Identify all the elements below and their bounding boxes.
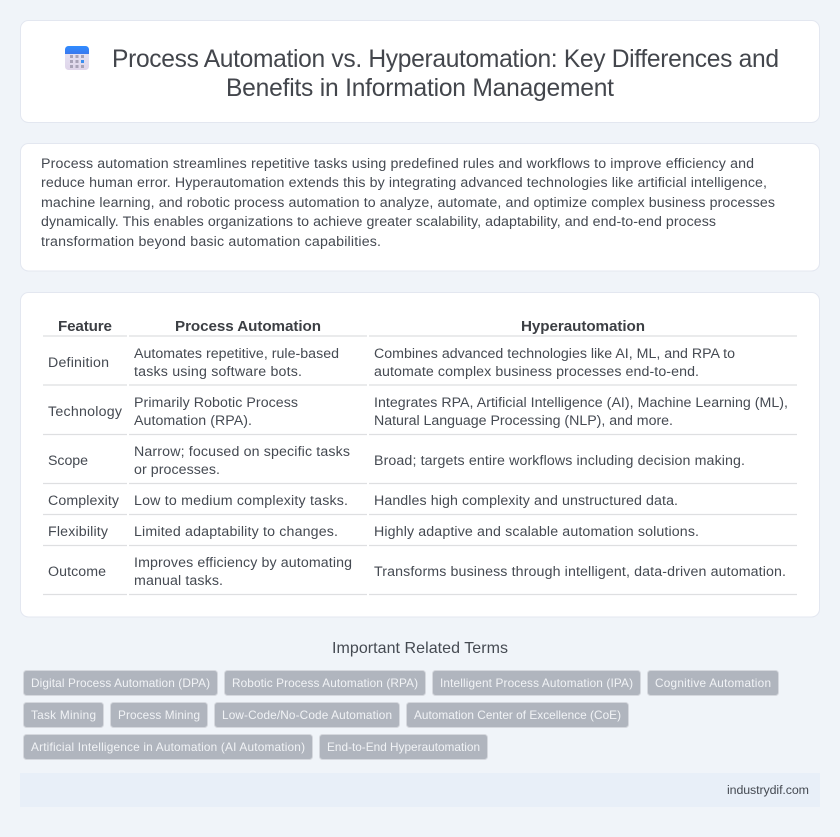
related terms heading: Important Related Terms bbox=[332, 640, 508, 657]
row: technology: Integrates RPA, Artificial Intelligence (AI), Machine Learning (ML), bbox=[374, 395, 788, 411]
row: flexibility: Flexibility bbox=[48, 524, 109, 540]
row: flexibility bbox=[48, 524, 699, 540]
row: scope: or processes. bbox=[134, 462, 220, 478]
row: definition: Combines advanced technologies like AI, ML, and RPA to bbox=[374, 346, 735, 362]
row: complexity: Handles high complexity and unstructured data. bbox=[374, 493, 678, 509]
row: outcome: Improves efficiency by automating bbox=[134, 555, 352, 571]
table header row: Process Automation bbox=[175, 318, 321, 335]
table header row: Hyperautomation bbox=[521, 318, 645, 335]
row: scope: Broad; targets entire workflows including decision making. bbox=[374, 453, 745, 469]
table header row: Feature bbox=[58, 318, 112, 335]
title: Process Automation vs. Hyperautomation: Key Differences and bbox=[112, 46, 779, 73]
row: definition bbox=[48, 346, 735, 380]
title bbox=[112, 46, 779, 102]
intro paragraph: dynamically. This enables organizations to achieve greater scalability, adaptability, and end-to-end process bbox=[41, 214, 716, 230]
footer bar bbox=[20, 773, 820, 807]
intro paragraph: Process automation streamlines repetitive tasks using predefined rules and workflows to improve efficiency and bbox=[41, 156, 754, 172]
row: definition: tasks using software bots. bbox=[134, 364, 302, 380]
row: definition: Automates repetitive, rule-based bbox=[134, 346, 339, 362]
row: outcome: Outcome bbox=[48, 564, 106, 580]
row: technology bbox=[48, 395, 788, 429]
related terms tags: Process Mining bbox=[118, 708, 200, 722]
row: outcome bbox=[48, 555, 786, 589]
row: complexity: Complexity bbox=[48, 493, 120, 509]
row: technology: Natural Language Processing (NLP), and more. bbox=[374, 413, 673, 429]
row: outcome: manual tasks. bbox=[134, 573, 223, 589]
related terms tags: Task Mining bbox=[31, 708, 96, 722]
related terms tags: Digital Process Automation (DPA) bbox=[31, 676, 210, 690]
intro paragraph: reduce human error. Hyperautomation extends this by integrating advanced technologies like artificial intelligence, bbox=[41, 175, 767, 191]
row: scope: Scope bbox=[48, 453, 88, 469]
intro paragraph bbox=[41, 156, 775, 250]
related terms tags: Intelligent Process Automation (IPA) bbox=[440, 676, 633, 690]
row: complexity: Low to medium complexity tasks. bbox=[134, 493, 348, 509]
intro paragraph: transformation beyond basic automation capabilities. bbox=[41, 234, 381, 250]
related terms tags: Cognitive Automation bbox=[655, 676, 771, 690]
row: technology: Primarily Robotic Process bbox=[134, 395, 298, 411]
row: technology: Technology bbox=[48, 404, 123, 420]
related terms tags: End-to-End Hyperautomation bbox=[327, 740, 480, 754]
row: definition: automate complex business processes end-to-end. bbox=[374, 364, 699, 380]
row: technology: Automation (RPA). bbox=[134, 413, 252, 429]
related terms tags: Artificial Intelligence in Automation (AI Automation) bbox=[31, 740, 305, 754]
intro text panel bbox=[20, 144, 820, 271]
table header row bbox=[58, 318, 645, 335]
row: outcome: Transforms business through intelligent, data-driven automation. bbox=[374, 564, 786, 580]
footer source: industrydif.com bbox=[727, 783, 809, 797]
icon: calendar bbox=[65, 46, 89, 70]
related terms tags bbox=[24, 670, 778, 760]
comparison table panel bbox=[20, 292, 820, 617]
related terms tags: Automation Center of Excellence (CoE) bbox=[414, 708, 621, 722]
related terms tags: Low-Code/No-Code Automation bbox=[222, 708, 392, 722]
title: Benefits in Information Management bbox=[226, 75, 614, 102]
row: flexibility: Highly adaptive and scalable automation solutions. bbox=[374, 524, 699, 540]
intro paragraph: machine learning, and robotic process automation to analyze, automate, and optimize complex business processes bbox=[41, 195, 775, 211]
row: flexibility: Limited adaptability to changes. bbox=[134, 524, 338, 540]
page header panel bbox=[20, 20, 820, 122]
row: complexity bbox=[48, 493, 678, 509]
row: scope bbox=[48, 444, 745, 478]
related terms tags: Robotic Process Automation (RPA) bbox=[232, 676, 418, 690]
row: definition: Definition bbox=[48, 355, 109, 371]
row: scope: Narrow; focused on specific tasks bbox=[134, 444, 350, 460]
